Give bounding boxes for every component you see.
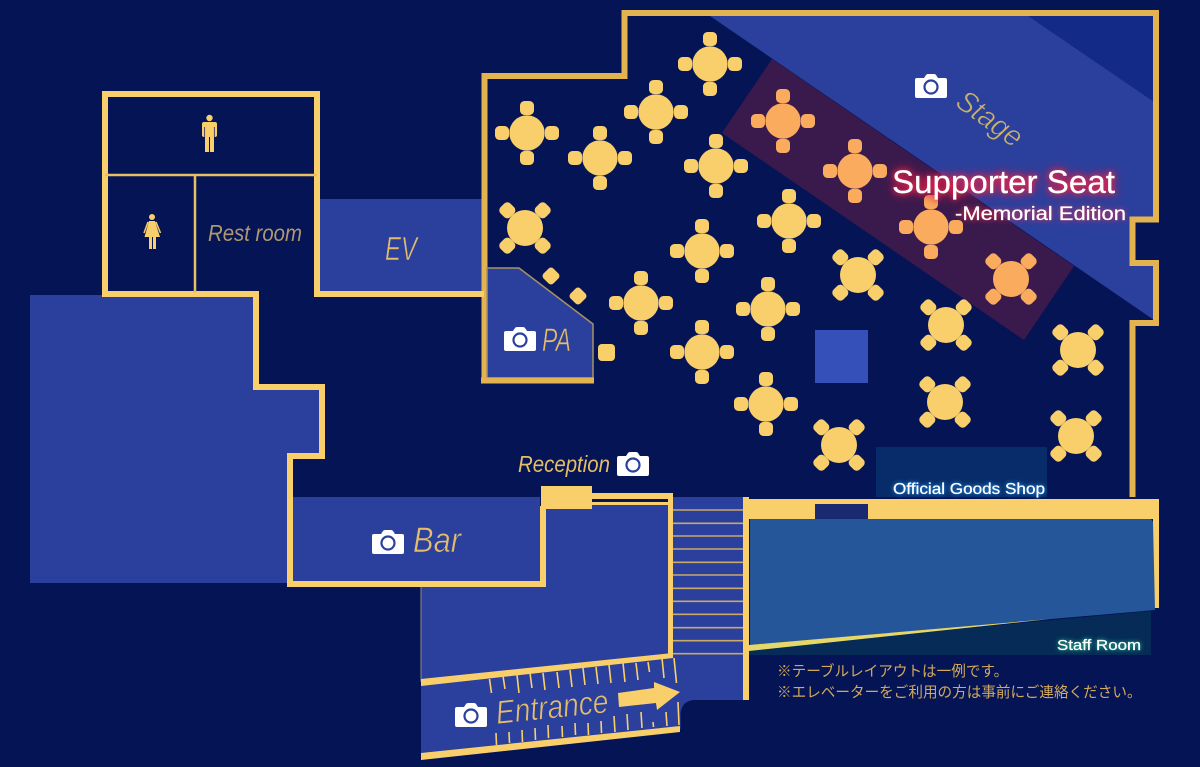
dark door bbox=[815, 504, 868, 519]
label: Bar: Bar bbox=[413, 521, 462, 560]
label: entrance: Entrance bbox=[494, 682, 610, 731]
icon: woman bbox=[144, 214, 160, 249]
label: reception: Reception bbox=[518, 451, 610, 477]
label: supporter seat: Supporter Seat bbox=[892, 164, 1115, 200]
icon: camera stage bbox=[915, 74, 947, 98]
label: stage: Stage bbox=[950, 84, 1029, 154]
footnotes: ※エレベーターをご利用の方は事前にご連絡ください。 bbox=[777, 684, 1142, 701]
tables: general seats bbox=[495, 32, 1106, 473]
label: staff room: Staff Room bbox=[1057, 637, 1141, 654]
walls: main hall bbox=[484, 13, 1156, 497]
panel: bar bbox=[293, 497, 540, 581]
walls: rest room block bbox=[102, 94, 543, 584]
footnotes: ※テーブルレイアウトは一例です。 bbox=[777, 662, 1008, 680]
icon: camera entrance bbox=[455, 703, 487, 727]
panel: PA booth bbox=[481, 268, 594, 380]
lobby slanted wall bbox=[421, 653, 673, 686]
PA stools bbox=[541, 266, 615, 361]
PA booth bottom wall bbox=[481, 378, 594, 384]
entrance lower wall bbox=[421, 726, 680, 760]
panel: left block bbox=[30, 295, 322, 583]
label: EV: EV bbox=[385, 230, 419, 267]
yellow sliver bbox=[749, 619, 1050, 651]
wall notch bbox=[1134, 221, 1156, 262]
label: memorial edition: -Memorial Edition bbox=[955, 204, 1126, 225]
label: official goods shop: Official Goods Shop bbox=[893, 481, 1045, 498]
tables: supporter seats bbox=[751, 89, 1039, 307]
entrance floor stripes bbox=[490, 658, 679, 745]
panel: supporter seat band bbox=[722, 59, 1074, 340]
entrance vertical wall bbox=[743, 497, 749, 700]
stage back corner bbox=[1028, 16, 1154, 102]
walls: reception corridor bbox=[421, 486, 749, 760]
center pillar bbox=[815, 330, 868, 383]
lobby left edge bbox=[420, 587, 422, 682]
icon: camera reception bbox=[617, 452, 649, 476]
icon: camera bbox=[504, 327, 536, 351]
panel: stage bbox=[710, 16, 1156, 320]
arrow: entrance direction bbox=[618, 682, 680, 710]
icon: camera bbox=[372, 530, 404, 554]
panel: official goods shop bbox=[876, 447, 1047, 498]
panel: staff room bbox=[749, 499, 1159, 655]
stair treads bbox=[673, 510, 743, 654]
label: PA: PA bbox=[542, 322, 571, 358]
reception desk bbox=[541, 486, 592, 509]
footnotes bbox=[777, 662, 1142, 701]
panel: lobby bbox=[421, 505, 668, 683]
panel: elevator bbox=[317, 199, 484, 294]
panel: stairs and entrance floor bbox=[421, 497, 744, 757]
staff room wall bbox=[749, 499, 1159, 608]
label: rest room: Rest room bbox=[208, 220, 302, 246]
icon: man bbox=[202, 115, 217, 152]
blue room area bbox=[750, 519, 1155, 645]
